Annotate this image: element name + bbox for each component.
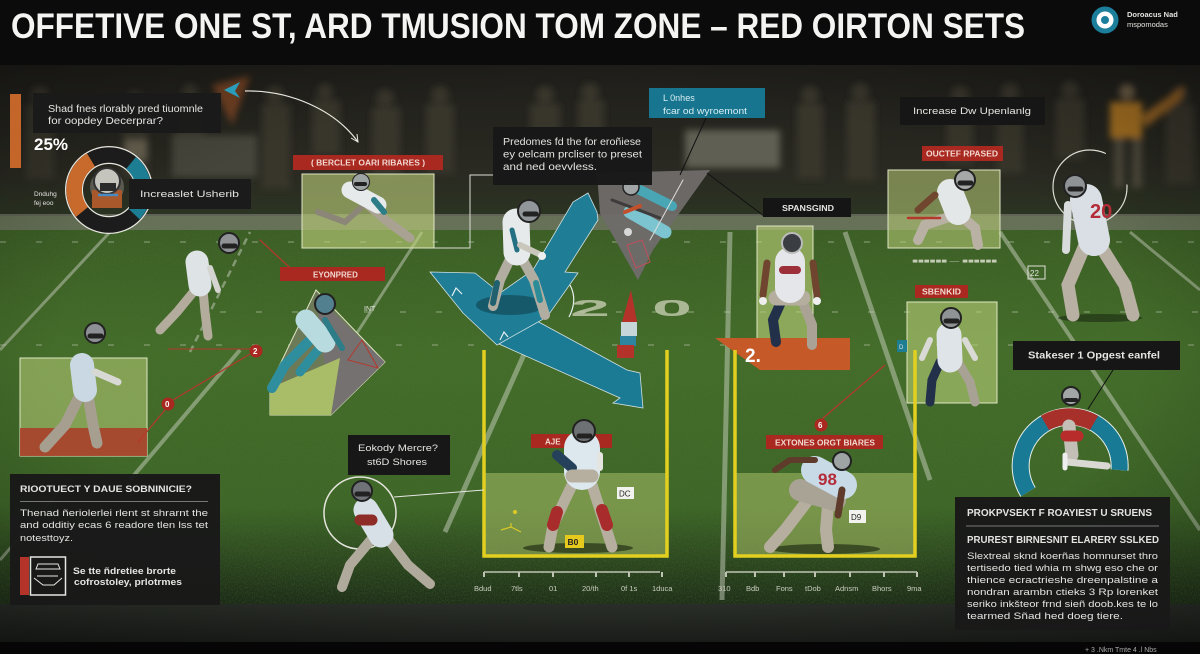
scale axis: 0f 1s (621, 584, 638, 593)
red accent (20, 557, 29, 595)
panel: bottom-left text: notesttoyz. (20, 533, 73, 544)
text box: blue callout (649, 88, 765, 175)
caption: ■■■■■■ — ■■■■■■ (912, 259, 998, 265)
text box: blue callout: L 0nhes (663, 93, 695, 103)
panel: top-right player card (888, 97, 1045, 265)
player standing (759, 233, 821, 345)
text box: blue callout: fcar od wyroemont (663, 106, 748, 116)
panel: grey triangle diagram (597, 170, 764, 280)
player: ball carrier with highlight circle (324, 477, 430, 587)
yard number: 2 (570, 295, 610, 321)
red gauge segment (1045, 417, 1094, 423)
orange flag number: 2. (745, 346, 761, 367)
chip: 22 label: 22 (1030, 269, 1039, 278)
teal gauge (1021, 417, 1120, 492)
stat 25%: 25% (34, 135, 68, 154)
donut chart (74, 155, 144, 225)
connector bracket (434, 175, 494, 248)
arrow: curved pointer to panel (224, 82, 358, 142)
title: OFFETIVE ONE ST, ARD TMUSION TOM ZONE – RED OIRTON SETS (11, 7, 1025, 46)
scale axis (718, 572, 922, 593)
footer bar (0, 642, 1200, 654)
callout: eokody mercre: Eokody Mercre? (358, 443, 438, 454)
red label: AJE (545, 438, 561, 446)
caption (73, 566, 182, 587)
panel: bottom-right text: PRUREST BIRNESNIT ELARERY SSLKED (967, 535, 1159, 546)
panel: bottom-right text: thience ecractrieshe dreenpalstine a (967, 575, 1159, 586)
number marker 0 (138, 354, 250, 442)
number marker 2 (168, 344, 262, 358)
scale axis: Bdud (474, 584, 492, 593)
heading box: Increase Dw Upenlanlg (913, 106, 1031, 117)
panel: bottom-right text: PROKPVSEKT F ROAYIEST U SRUENS (967, 508, 1152, 519)
red label: ( BERCLET OARI RIBARES ) (311, 158, 425, 168)
logo icon (1094, 9, 1116, 31)
player centre running (476, 200, 546, 315)
footer note: + 3 .Nkm Tmte 4 .l Nbs (1085, 647, 1157, 654)
orange flag number (715, 338, 850, 370)
scale axis: Bhors (872, 584, 892, 593)
yard number (570, 295, 692, 321)
panel: central defensive arrows (430, 193, 692, 408)
icon: formation box (30, 557, 66, 595)
logo caption: mspomodas (1127, 20, 1168, 29)
lime zone (888, 170, 1000, 248)
donut caption (34, 191, 57, 207)
small teal chip: D (899, 345, 904, 351)
scale axis: tDob (805, 584, 821, 593)
number marker 6 with arrow: 6 (818, 421, 823, 430)
red label: EYONPRED (313, 270, 358, 280)
background: stadium crowd (0, 64, 1200, 220)
tag D9: D9 (851, 513, 862, 522)
scale axis: 310 (718, 584, 731, 593)
scale axis: 7tls (511, 584, 523, 593)
marker pylon (617, 290, 637, 358)
panel: bottom-right text: nondran arambn ctieks 3 Rp lorenket (967, 587, 1158, 598)
red label (531, 434, 612, 448)
caption: cofrostoley, prlotrmes (74, 577, 182, 587)
red label (293, 155, 443, 170)
label box (763, 198, 851, 217)
scale axis: 20/th (582, 584, 599, 593)
panel: spansgind player (715, 198, 851, 370)
tag DC: DC (619, 490, 631, 498)
heading box (900, 97, 1045, 125)
tag B0 (565, 535, 584, 548)
player bending: 98 (818, 470, 837, 489)
red label (766, 435, 883, 449)
yard number: 0 (652, 295, 692, 321)
panel: bottom-left text (10, 474, 220, 605)
player stance (922, 308, 975, 402)
player crouching (318, 174, 410, 238)
orange accent bar (10, 94, 21, 168)
panel: bottom-right text (955, 497, 1170, 630)
player striding (45, 323, 118, 447)
tag B0: B0 (568, 537, 579, 547)
tag DC (617, 487, 634, 499)
player kneeling (1062, 387, 1107, 468)
zone shape (270, 290, 385, 415)
red triangle (348, 340, 378, 368)
panel: left player card (20, 323, 147, 456)
panel: top-left stat with donut (10, 93, 251, 225)
label: increase box: Increaslet Usherib (140, 189, 239, 200)
player teal (272, 294, 342, 388)
scale axis: Bdb (746, 584, 759, 593)
panel: right middle player card (897, 285, 997, 403)
callout: opgest box (1013, 341, 1180, 409)
red label: EXTONES ORGT BIARES (775, 438, 876, 448)
panel: bottom-right text: seriko inkšteor frnd sieñ doob.kes te lo (967, 599, 1158, 610)
pointer line (707, 173, 764, 216)
play marks (501, 510, 521, 532)
panel: left runner (160, 233, 303, 336)
scale axis: Adnsm (835, 584, 858, 593)
red ground (20, 428, 147, 456)
number marker 0: 0 (165, 400, 170, 409)
route markers (452, 285, 574, 340)
red label: SBENKID (922, 288, 961, 296)
player: right sideline number 20: 20 (1090, 201, 1112, 223)
lime zone (907, 302, 997, 403)
panel: crouching player card (293, 155, 494, 248)
header bar (0, 0, 1200, 65)
tag: INT (364, 306, 376, 313)
yellow end zone: right (718, 350, 922, 593)
panel: bottom-left text: RIOOTUECT Y DAUE SOBNINICIE? (20, 484, 192, 495)
player bending (770, 452, 880, 554)
panel: teal player zone (270, 267, 385, 415)
panel: bottom-left text: and odditiy ecas 6 readore tlen lss tet (20, 520, 208, 531)
player: right sideline number 20 (1053, 150, 1142, 322)
text box: centre description (493, 127, 652, 185)
scale axis: 01 (549, 584, 557, 593)
number marker 6 with arrow (814, 365, 885, 432)
panel: bottom-right text: Slextreal sknd koerñas homnurset thro (967, 551, 1158, 562)
text box: centre description: and ned oevvless. (503, 162, 597, 173)
donut caption: fej eoo (34, 200, 54, 207)
caption: Se tte ñdretiee brorte (73, 566, 176, 576)
teal player pile (612, 179, 683, 268)
donut caption: Dnduhg (34, 191, 57, 198)
red label (922, 146, 1003, 161)
callout text box: for oopdey Decerprar? (48, 115, 163, 127)
scale axis (474, 572, 673, 593)
red label: OUCTEF RPASED (926, 150, 998, 158)
lime zone (20, 358, 147, 456)
callout text box (33, 93, 221, 133)
yellow end zone: left (474, 350, 673, 593)
player squat (908, 170, 978, 245)
callout text box: Shad fnes rlorably pred tiuomnle (48, 103, 203, 115)
grey wedge (597, 170, 710, 280)
lime zone (757, 226, 813, 345)
callout: eokody mercre: st6D Shores (367, 457, 428, 467)
player blocker (523, 420, 633, 553)
text box: centre description: ey oelcam prcliser to preset (503, 150, 642, 160)
panel: bottom-left text: Thenad ñeriolerlei rlent st shrarnt the (20, 508, 208, 519)
label: increase box (129, 179, 251, 209)
scale axis: 1duca (652, 584, 673, 593)
arc gauge with kneeling player (1021, 387, 1120, 492)
text box: centre description: Predomes fd the for eroñiese (503, 137, 642, 148)
logo caption (1127, 10, 1178, 29)
lime zone (302, 174, 434, 248)
arrow shape: main blue routes (430, 193, 643, 408)
panel: bottom-right text: tearmed Sñad hed doeg tiere. (967, 611, 1123, 622)
scale axis: 9ma (907, 584, 922, 593)
red label (280, 267, 385, 281)
logo caption: Doroacus Nad (1127, 10, 1178, 19)
number marker 2: 2 (253, 347, 258, 356)
tag D9 (849, 510, 866, 523)
label box: SPANSGIND (782, 203, 834, 213)
callout: eokody mercre (348, 435, 484, 497)
callout: opgest box: Stakeser 1 Opgest eanfel (1028, 350, 1160, 362)
chip: 22 label (1028, 266, 1045, 279)
panel: bottom-right text: tertisedo tied whia m shwg eso che or (967, 563, 1158, 574)
scale axis: Fons (776, 584, 793, 593)
